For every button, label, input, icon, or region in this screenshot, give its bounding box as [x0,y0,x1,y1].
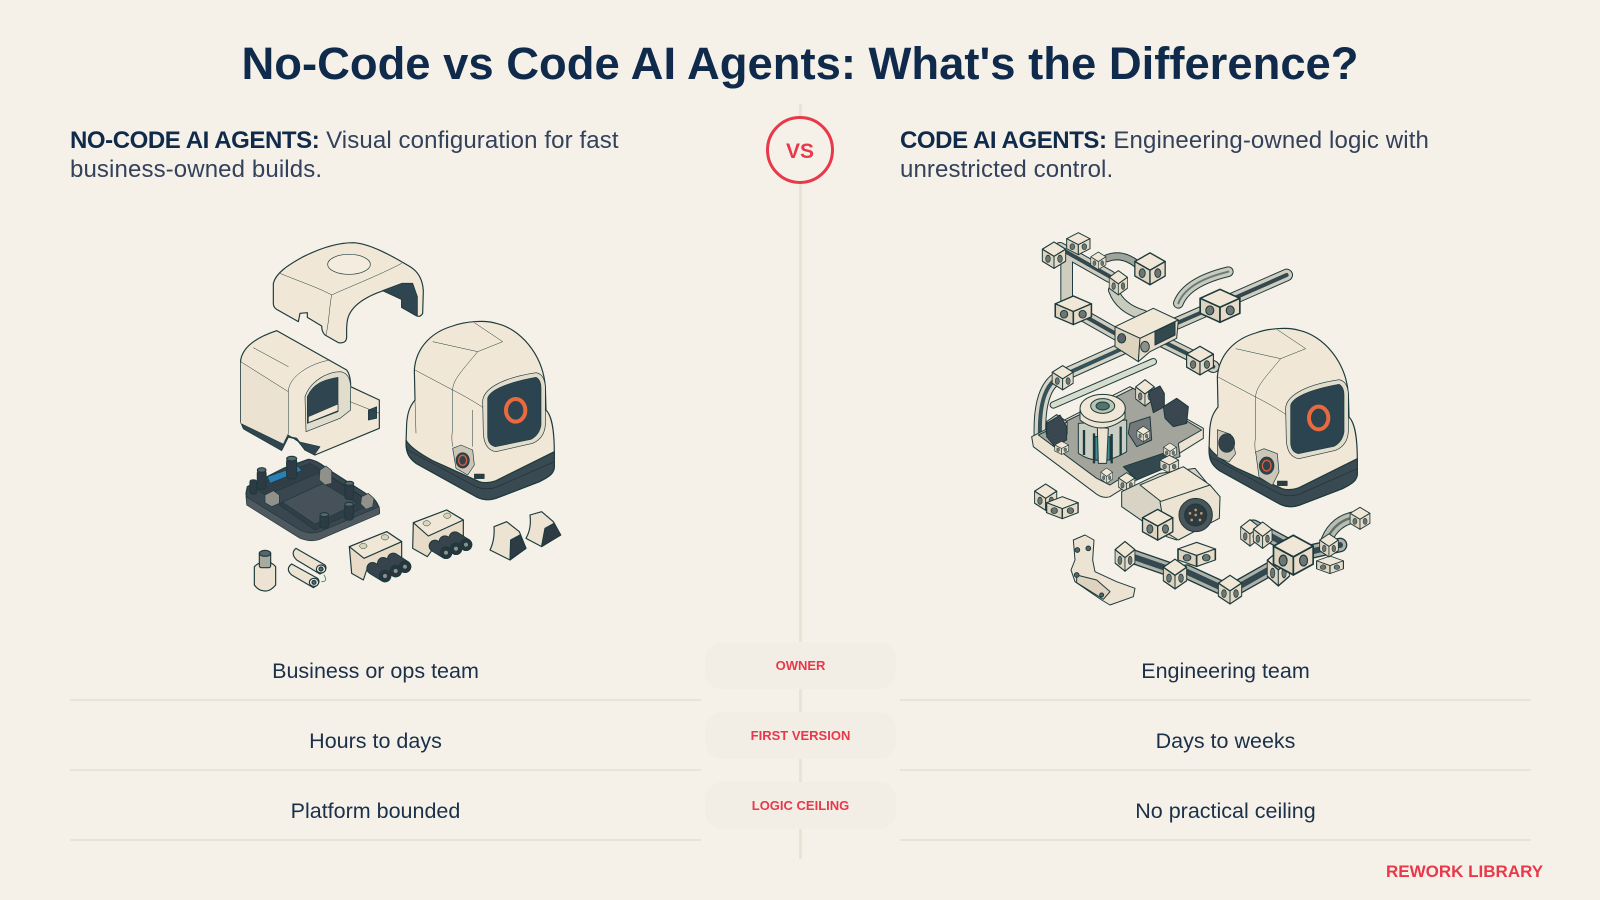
row 1 left value: Business or ops team [272,659,479,683]
wedge clips [490,512,561,560]
right port [1256,449,1279,485]
loose small blocks [1035,484,1078,519]
VS badge: VS [786,140,814,163]
lower L bracket [1071,535,1135,605]
orange ring [506,399,525,422]
illustration: no-code exploded robot kit [240,242,562,592]
row 3 label: LOGIC CEILING [752,798,849,813]
row 3 label [705,782,896,829]
rail blocks upper [1042,233,1240,390]
turbine cylinder [1078,394,1127,463]
control board [1032,380,1203,497]
row 1 right value: Engineering team [1141,659,1310,683]
lower blocks [1115,507,1370,604]
left heading: no-code: business-owned builds. [70,156,322,183]
motor module [1122,467,1220,540]
row 2 left value: Hours to days [309,729,442,753]
right heading: code [900,127,1429,183]
connector one [349,532,411,582]
port [453,445,474,475]
right heading: code: CODE AI AGENTS: Engineering-owned logic with [900,127,1429,154]
right heading: code: unrestricted control. [900,156,1113,183]
frame rails upper [1040,248,1287,437]
left heading: no-code: NO-CODE AI AGENTS: Visual configuration for fast [70,127,619,154]
robot, assembled (no-code side) [405,320,555,500]
title: No-Code vs Code AI Agents: What's the Difference? [241,38,1359,89]
center divider line [799,104,802,859]
spacer standoff [254,550,276,591]
row 3 right value: No practical ceiling [1135,799,1316,823]
row 2 right value: Days to weeks [1156,729,1295,753]
VS badge [766,116,834,184]
small cylinders [288,548,326,588]
illustration: code agent modular assembly [1031,232,1370,606]
front housing shell [241,331,379,455]
row 1 label: OWNER [776,658,825,673]
footer brand: REWORK LIBRARY [1386,862,1543,881]
orange ring [1309,407,1328,429]
left heading: no-code [70,127,619,183]
row 2 label: FIRST VERSION [751,728,850,743]
lower rail assembly [1123,517,1357,592]
central cross block [1115,308,1178,362]
top cover shell [273,243,423,343]
robot, assembled (code side) [1208,328,1358,508]
row 2 label [705,712,896,759]
connector two [413,510,472,558]
left port [1217,430,1236,462]
dark base tray [246,456,379,541]
row 3 left value: Platform bounded [291,799,460,823]
robot body [406,321,554,500]
robot body [1209,328,1357,507]
row 1 label [705,642,896,689]
